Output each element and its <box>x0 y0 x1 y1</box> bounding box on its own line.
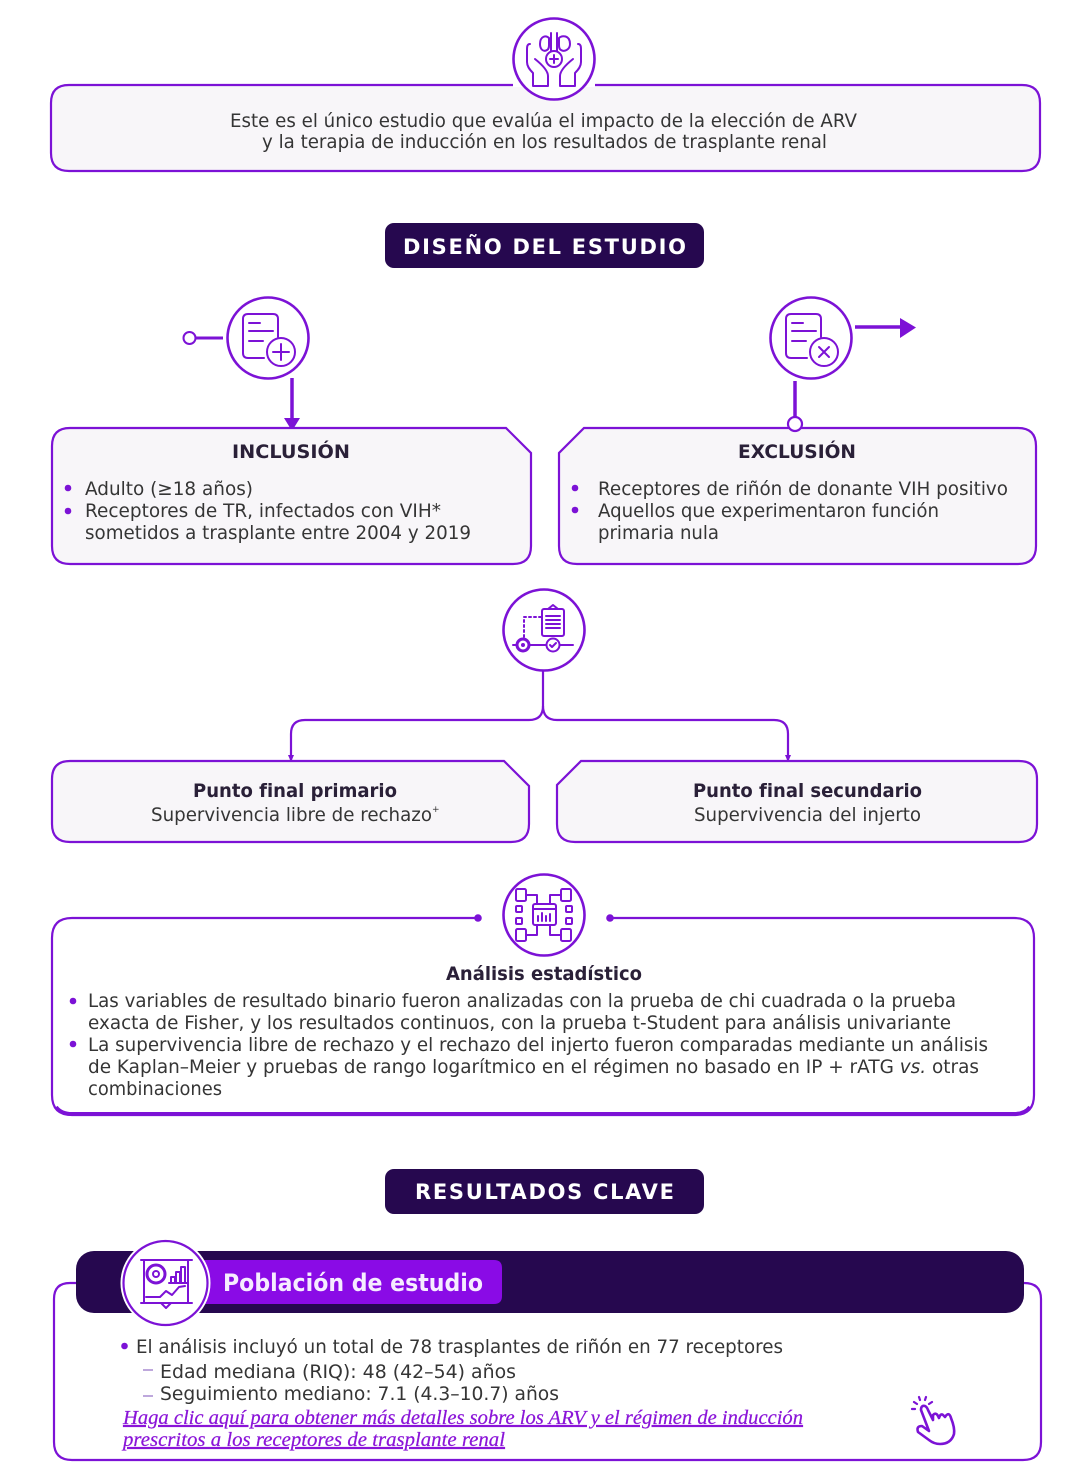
heading: study design: DISEÑO DEL ESTUDIO <box>403 234 686 259</box>
icon: presentation board <box>120 1238 210 1328</box>
panel: secondary endpoint: Supervivencia del injerto <box>694 804 921 826</box>
panel: exclusion <box>559 417 1036 564</box>
panel: primary endpoint <box>52 761 529 842</box>
panel: study population: prescritos a los receptores de trasplante renal <box>121 1429 505 1451</box>
icon: hands holding kidneys <box>513 18 595 100</box>
panel: primary endpoint: Supervivencia libre de rechazo <box>151 804 432 826</box>
panel: statistical analysis: de Kaplan–Meier y pruebas de rango logarítmico en el régimen no basado en IP + rATG vs. otras <box>88 1056 979 1078</box>
banner: study population heading <box>76 1251 1024 1313</box>
panel: secondary endpoint <box>557 761 1037 842</box>
panel: key statement: y la terapia de inducción en los resultados de trasplante renal <box>262 131 827 153</box>
heading: study design <box>385 223 704 268</box>
panel: inclusion: INCLUSIÓN <box>232 439 350 463</box>
panel: study population <box>54 1238 1041 1460</box>
panel: key statement <box>51 85 1040 171</box>
panel: exclusion: Aquellos que experimentaron función <box>598 500 939 522</box>
banner: study population heading: Población de estudio <box>223 1269 483 1297</box>
panel: study population: Seguimiento mediano: 7.1 (4.3–10.7) años <box>160 1383 559 1405</box>
heading: key results <box>385 1169 704 1214</box>
icon: clicking hand <box>912 1397 954 1444</box>
panel: inclusion: sometidos a trasplante entre 2004 y 2019 <box>85 522 471 544</box>
panel: exclusion: Receptores de riñón de donante VIH positivo <box>598 478 1008 500</box>
icon: data analysis network <box>504 874 584 956</box>
panel: secondary endpoint: Punto final secundario <box>693 780 922 802</box>
panel: statistical analysis: Análisis estadístico <box>446 963 642 985</box>
icon: process checklist <box>504 590 584 670</box>
panel: primary endpoint: Punto final primario <box>193 780 397 802</box>
panel: inclusion: Receptores de TR, infectados con VIH* <box>85 500 441 522</box>
panel: primary endpoint: + <box>432 805 440 815</box>
panel: statistical analysis: combinaciones <box>88 1078 222 1100</box>
panel: study population: El análisis incluyó un total de 78 trasplantes de riñón en 77 receptores <box>136 1336 783 1358</box>
panel: inclusion: Adulto (≥18 años) <box>85 478 253 500</box>
panel: key statement: Este es el único estudio que evalúa el impacto de la elección de ARV <box>230 110 857 132</box>
panel: statistical analysis: exacta de Fisher, y los resultados continuos, con la prueba t-Student para análisis univariante <box>88 1012 951 1034</box>
panel: statistical analysis <box>52 914 1034 1115</box>
panel: exclusion: primaria nula <box>598 522 719 544</box>
panel: study population: Haga clic aquí para obtener más detalles sobre los ARV y el régimen de inducción <box>122 1407 803 1429</box>
panel: inclusion <box>52 428 531 564</box>
connector: endpoints branch <box>288 670 791 762</box>
icon: inclusion document connector <box>184 298 308 431</box>
panel: statistical analysis: La supervivencia libre de rechazo y el rechazo del injerto fueron comparadas mediante un análisis <box>88 1034 988 1056</box>
panel: exclusion: EXCLUSIÓN <box>738 439 856 463</box>
heading: key results: RESULTADOS CLAVE <box>415 1180 674 1204</box>
panel: statistical analysis: Las variables de resultado binario fueron analizadas con la prueba de chi cuadrada o la prueba <box>88 990 956 1012</box>
panel: study population: Edad mediana (RIQ): 48 (42–54) años <box>160 1361 516 1383</box>
icon: exclusion document connector <box>770 298 916 418</box>
